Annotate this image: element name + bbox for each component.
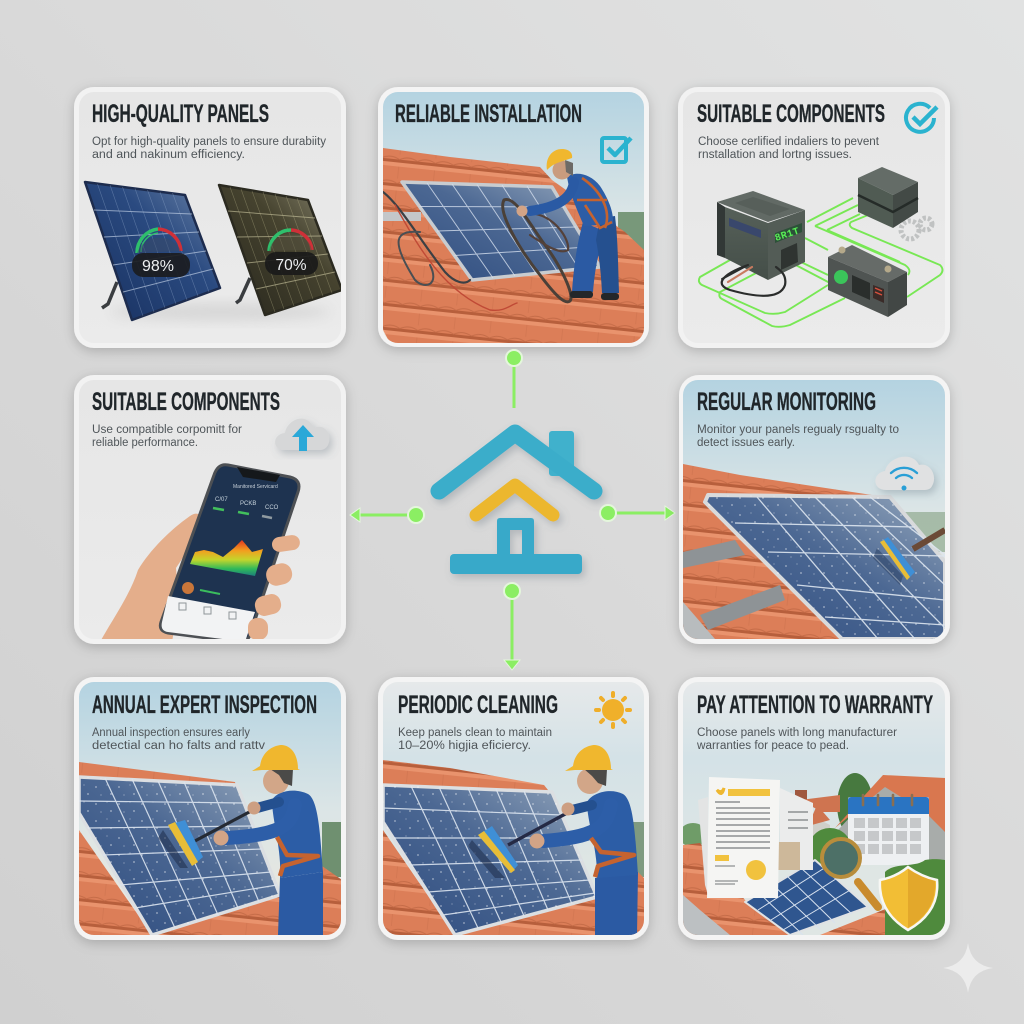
heading: SUITABLE COMPONENTS bbox=[697, 100, 885, 128]
body text bbox=[696, 727, 897, 752]
icon: sparkle bbox=[943, 943, 993, 993]
roof bbox=[383, 148, 644, 343]
arrow: right connector bbox=[600, 505, 675, 521]
body text: warranties for peace to pead. bbox=[696, 740, 849, 752]
panel: suitable components (app) bbox=[74, 375, 346, 644]
body text bbox=[92, 727, 265, 752]
icon: central house bbox=[439, 431, 594, 574]
body text bbox=[698, 136, 880, 161]
brush bbox=[468, 813, 567, 878]
panel: periodic cleaning bbox=[378, 677, 649, 940]
brush bbox=[873, 530, 945, 585]
panel: reliable installation bbox=[378, 87, 649, 347]
solar panel bbox=[402, 182, 600, 280]
body text bbox=[92, 424, 242, 449]
brush bbox=[158, 810, 253, 868]
icon: smartphone: CCO bbox=[265, 505, 279, 511]
green wiring bbox=[699, 198, 942, 327]
heading: HIGH-QUALITY PANELS bbox=[92, 100, 269, 128]
icon: smartphone: C/07 bbox=[215, 497, 228, 503]
body text: Use compatible corpomitt for bbox=[92, 424, 242, 436]
icon: shield bbox=[880, 867, 937, 930]
body text: Keep panels clean to maintain bbox=[398, 727, 552, 739]
icon: check badge bbox=[906, 104, 937, 132]
icon: cloud upload bbox=[275, 419, 329, 451]
icon: smartphone bbox=[160, 465, 299, 642]
icon: calendar bbox=[848, 795, 929, 865]
solar panel bbox=[745, 860, 868, 935]
icon: blue solar panel with gauge: 98% bbox=[142, 258, 174, 275]
arrow: up connector bbox=[506, 350, 522, 408]
icon: fingers bbox=[248, 534, 301, 640]
solar panel bbox=[79, 777, 280, 935]
icon: magnifier bbox=[822, 839, 878, 907]
icon: smartphone: Manitored Servicard bbox=[233, 484, 278, 490]
body text bbox=[398, 727, 552, 752]
heading: ANNUAL EXPERT INSPECTION bbox=[92, 691, 317, 719]
body text: Choose cerlified indaliers to pevent bbox=[698, 136, 880, 148]
green bush bbox=[885, 859, 945, 935]
heading: REGULAR MONITORING bbox=[697, 388, 876, 416]
arrow: down connector bbox=[504, 583, 520, 670]
heading: SUITABLE COMPONENTS bbox=[92, 388, 280, 416]
icon: smartphone: PCKB bbox=[240, 501, 256, 507]
body text: reliable performance. bbox=[92, 437, 198, 449]
panel: high-quality panels bbox=[74, 87, 346, 348]
cables bbox=[722, 265, 785, 296]
roof bbox=[383, 760, 646, 935]
icon: inverter box bbox=[717, 191, 805, 280]
body text: detectial can ho falts and rattv bbox=[92, 740, 265, 752]
body text: Choose panels with long manufacturer bbox=[697, 727, 897, 739]
body text bbox=[697, 424, 899, 449]
icon: gear bbox=[901, 218, 932, 239]
roof bbox=[683, 843, 790, 935]
body text: and and nakinum efficiency. bbox=[92, 149, 245, 161]
panel: annual expert inspection bbox=[74, 677, 346, 940]
icon: stacked box bbox=[858, 167, 918, 228]
body text: Monitor your panels regualy rsgualty to bbox=[697, 424, 899, 436]
solar panel bbox=[705, 495, 945, 639]
icon: second document bbox=[778, 788, 813, 870]
icon: warranty document bbox=[698, 777, 780, 898]
body text: Opt for high-quality panels to ensure durabiity bbox=[92, 136, 326, 148]
roof bbox=[683, 464, 872, 639]
icon: cloud wifi bbox=[875, 457, 934, 490]
panel: regular monitoring bbox=[679, 375, 950, 644]
icon: aged solar panel with gauge: 70% bbox=[275, 257, 307, 274]
icon: aged solar panel with gauge bbox=[219, 185, 342, 315]
icon: inverter box: 8R1T bbox=[774, 227, 801, 245]
body text: Annual inspection ensures early bbox=[92, 727, 250, 739]
worker bbox=[214, 745, 323, 935]
cables bbox=[383, 192, 571, 310]
body text: rnstallation and lortng issues. bbox=[698, 149, 852, 161]
worker bbox=[516, 149, 619, 300]
icon: blue solar panel with gauge bbox=[85, 182, 220, 320]
heading: RELIABLE INSTALLATION bbox=[395, 100, 582, 128]
worker bbox=[530, 745, 638, 935]
body text: 10–20% higjia eficiercy. bbox=[398, 740, 531, 752]
arrow: left connector bbox=[350, 507, 424, 523]
icon: hand bbox=[100, 514, 201, 642]
roof bbox=[79, 762, 342, 935]
heading: PERIODIC CLEANING bbox=[398, 691, 558, 719]
panel: suitable components (equipment) bbox=[678, 87, 950, 348]
icon: checkbox bbox=[602, 138, 631, 162]
body text bbox=[92, 136, 326, 161]
body text: detect issues early. bbox=[697, 437, 795, 449]
icon: battery bbox=[828, 245, 907, 317]
icon: sun bbox=[596, 693, 630, 727]
panel: pay attention to warranty bbox=[678, 677, 950, 940]
background houses and trees bbox=[679, 773, 945, 880]
mounting rails bbox=[683, 540, 785, 630]
solar panel bbox=[383, 785, 597, 935]
